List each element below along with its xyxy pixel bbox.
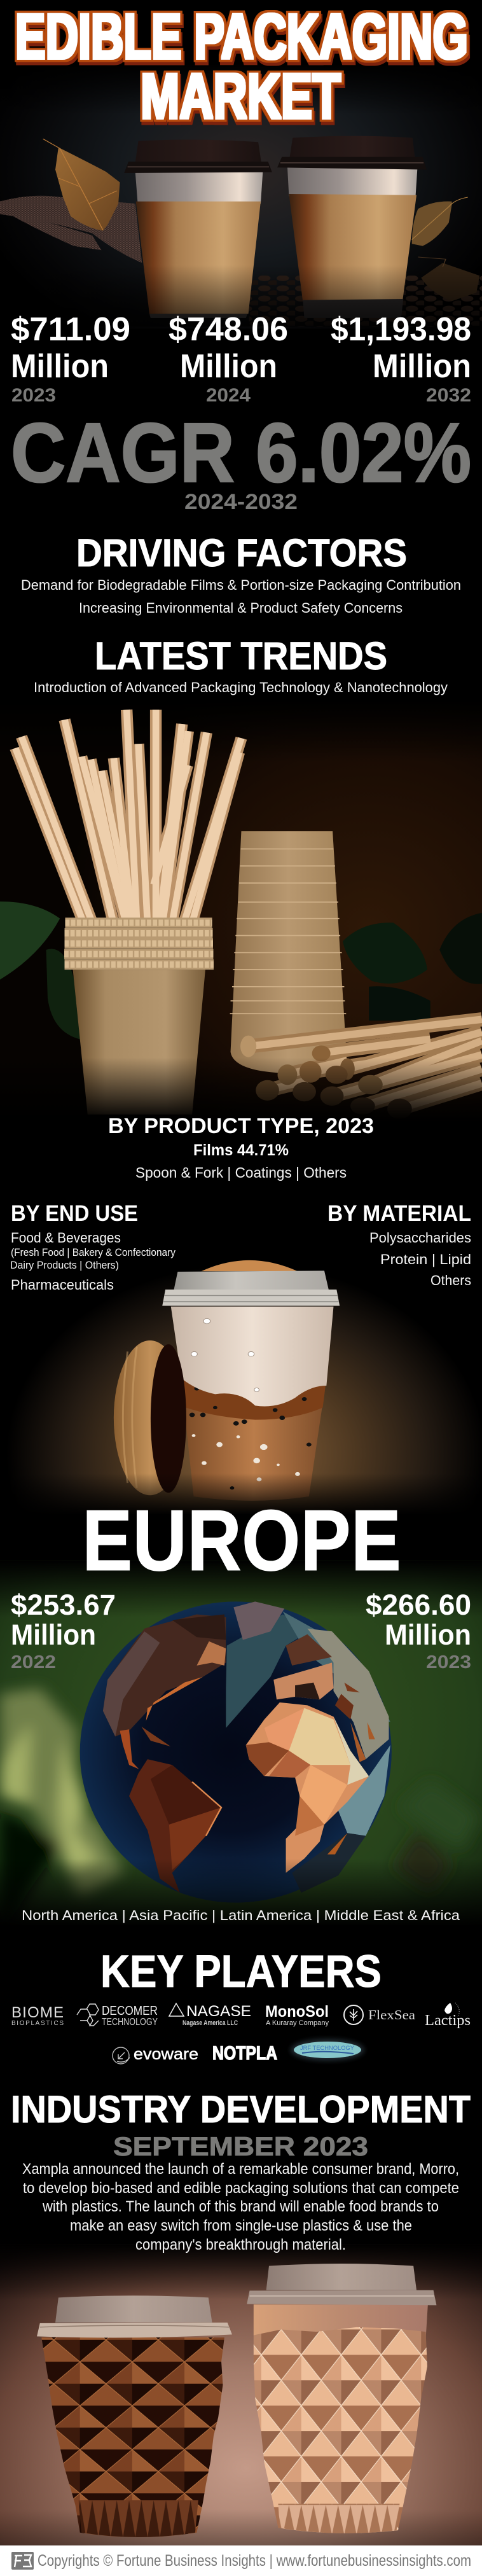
heading: key players: KEY PLAYERS — [100, 1947, 382, 1997]
by material panel: Polysaccharides — [369, 1230, 471, 1246]
logo: MonoSol: A Kuraray Company — [266, 2019, 329, 2027]
Europe value 2023: $266.60 — [366, 1589, 471, 1621]
hero image: coffee cups — [0, 64, 482, 329]
logo: Notpla: NOTPLA — [212, 2043, 277, 2064]
cup lid rim — [162, 1290, 340, 1305]
cup lid — [174, 1271, 329, 1291]
logo: FlexSea — [344, 2005, 416, 2024]
by end use panel: BY END USE — [11, 1201, 138, 1226]
market size 2024 — [169, 311, 288, 406]
logo: Lactips: Lactips — [425, 2012, 471, 2029]
market size 2024: $748.06 — [169, 311, 288, 348]
product type heading: BY PRODUCT TYPE, 2023 — [108, 1114, 374, 1138]
logo: Nagase — [169, 2003, 251, 2027]
development text: with plastics. The launch of this brand will enable food brands to — [42, 2198, 439, 2215]
by end use panel: Dairy Products | Others) — [10, 1259, 119, 1271]
market size 2024: Million — [180, 348, 277, 385]
Europe value 2023: Million — [385, 1619, 471, 1651]
logo: Evoware: evoware — [134, 2045, 198, 2063]
straws in cup — [15, 710, 241, 924]
market size 2032: Million — [373, 348, 471, 385]
coffee cup image — [0, 1206, 482, 1515]
europe and asia — [307, 1629, 389, 1759]
Europe value 2023: 2023 — [426, 1652, 471, 1673]
greenland — [233, 1601, 284, 1640]
by material panel — [327, 1201, 471, 1288]
market size 2032: $1,193.98 — [331, 311, 471, 348]
by material panel: BY MATERIAL — [327, 1201, 471, 1226]
region heading: Europe: EUROPE — [82, 1492, 401, 1589]
south america — [129, 1759, 221, 1893]
driving factors list — [21, 577, 461, 616]
teal ocean facets — [226, 1614, 313, 1728]
logo: MonoSol: MonoSol — [265, 2003, 329, 2021]
lower right leaf — [421, 263, 479, 301]
left leaf — [55, 148, 120, 231]
market size 2032 — [331, 311, 471, 406]
north america — [103, 1614, 226, 1736]
dots on cup — [189, 1387, 312, 1489]
market size 2024: 2024 — [206, 385, 251, 406]
market size 2032: 2032 — [426, 385, 471, 406]
CAGR period: 2024-2032 — [184, 490, 298, 514]
logo: Lactips — [425, 2003, 471, 2029]
Europe value 2022: Million — [11, 1619, 96, 1651]
market size 2023 — [11, 311, 130, 406]
right coffee cup — [277, 136, 427, 318]
logo: Decomer Technology — [77, 2004, 158, 2028]
globe image — [0, 1561, 482, 1942]
leaning lid — [114, 1340, 186, 1495]
blurred leaves — [0, 1688, 479, 1938]
by end use panel: Food & Beverages — [11, 1230, 121, 1246]
left coffee cup — [124, 140, 272, 318]
heading: latest trends: LATEST TRENDS — [95, 634, 387, 678]
title: MARKET — [141, 61, 341, 132]
logo: Biome Bioplastics: BIOPLASTICS — [11, 2020, 64, 2027]
development text — [22, 2161, 459, 2253]
by end use panel: (Fresh Food | Bakery & Confectionary — [11, 1246, 176, 1258]
loose straws — [240, 1019, 482, 1119]
cup lower brown section — [181, 1376, 327, 1501]
green leaves right — [343, 913, 482, 1020]
green leaves left — [0, 902, 80, 1039]
logo: Biome Bioplastics: BIOME — [11, 2004, 64, 2021]
heading: driving factors: DRIVING FACTORS — [76, 531, 407, 574]
product type values — [135, 1141, 347, 1181]
bottom image: origami cups — [0, 2244, 482, 2547]
by end use panel: Pharmaceuticals — [11, 1277, 114, 1293]
date: September 2023: SEPTEMBER 2023 — [113, 2131, 368, 2161]
logo: Decomer Technology: TECHNOLOGY — [102, 2017, 158, 2028]
cup white section — [171, 1307, 333, 1407]
other regions: North America | Asia Pacific | Latin America | Middle East & Africa — [22, 1907, 460, 1923]
logo: Nagase: Nagase America LLC — [182, 2019, 238, 2027]
product image: straws and cups — [0, 700, 482, 1146]
coffee beans — [249, 275, 482, 326]
by material panel: Protein | Lipid — [380, 1251, 471, 1267]
market size 2023: $711.09 — [11, 311, 130, 348]
Europe value 2022: $253.67 — [11, 1589, 116, 1621]
market size 2023: Million — [11, 348, 109, 385]
product type values: Films 44.71% — [193, 1141, 289, 1159]
globe — [80, 1601, 392, 1903]
logo: JRF Technology: JRF TECHNOLOGY — [300, 2045, 354, 2051]
foam dome — [202, 1260, 298, 1271]
development text: make an easy switch from single-use plastics & use the — [70, 2217, 412, 2234]
kraft cup — [64, 922, 214, 1115]
by end use panel — [10, 1201, 176, 1293]
development text: company's breakthrough material. — [135, 2236, 346, 2253]
driving factors list: Increasing Environmental & Product Safety Concerns — [79, 600, 403, 616]
central america — [120, 1729, 139, 1769]
market size 2023: 2023 — [11, 385, 56, 406]
Europe value 2023 — [366, 1589, 471, 1673]
africa — [246, 1702, 369, 1873]
logo: Decomer Technology: DECOMER — [102, 2004, 158, 2018]
Europe value 2022 — [11, 1589, 116, 1673]
logo: Evoware — [113, 2045, 198, 2064]
burlap cloth — [0, 196, 142, 263]
left origami cup — [37, 2295, 232, 2537]
title — [15, 1, 468, 132]
product type values: Spoon & Fork | Coatings | Others — [135, 1164, 347, 1181]
driving factors list: Demand for Biodegradable Films & Portion-size Packaging Contribution — [21, 577, 461, 593]
stacked cups — [230, 831, 346, 1073]
icon: Fortune Business Insights logo — [11, 2552, 34, 2570]
latest trends text: Introduction of Advanced Packaging Technology & Nanotechnology — [34, 679, 448, 695]
logo: JRF Technology — [291, 2039, 364, 2061]
logo: Nagase: NAGASE — [186, 2003, 251, 2020]
footer bar — [0, 2545, 482, 2576]
Europe value 2022: 2022 — [11, 1652, 56, 1673]
by material panel: Others — [430, 1272, 471, 1288]
right origami cup — [247, 2264, 436, 2533]
right leaf — [412, 201, 452, 246]
logo: FlexSea: FlexSea — [368, 2007, 416, 2023]
